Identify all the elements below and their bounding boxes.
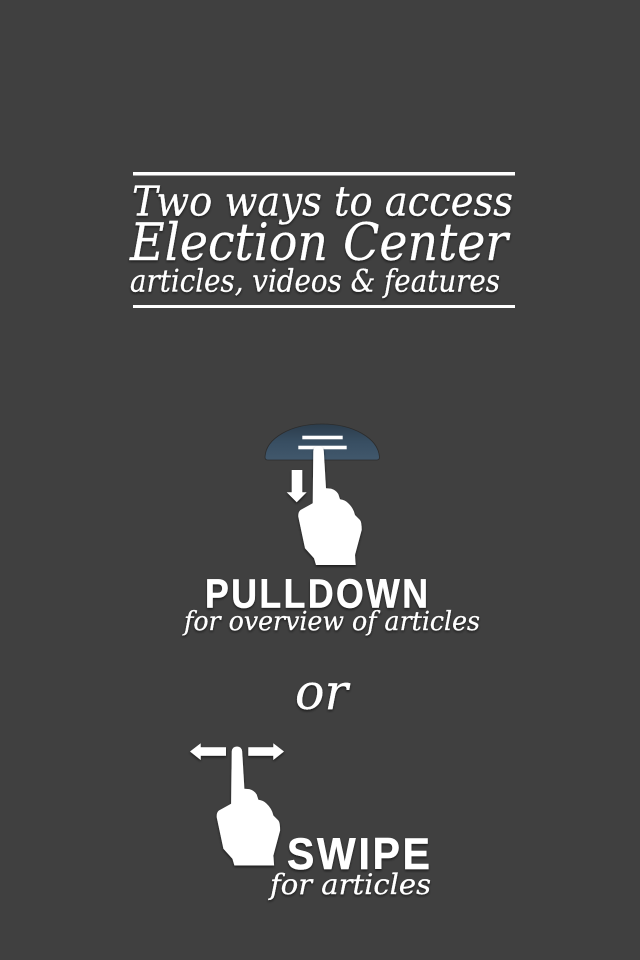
heading: swipe: SWIPE xyxy=(287,829,430,879)
title line 1: Two ways to access xyxy=(132,178,513,226)
swipe label xyxy=(268,829,431,901)
heading: pulldown: PULLDOWN xyxy=(205,571,428,617)
icon: left arrow xyxy=(190,743,226,760)
icon: right arrow xyxy=(248,743,284,760)
caption: pulldown: for overview of articles xyxy=(182,607,480,637)
title block xyxy=(129,172,515,308)
icon: tab menu lines xyxy=(298,436,347,449)
icon: pointing hand xyxy=(298,446,362,565)
pulldown gesture icon xyxy=(265,424,380,565)
swipe gesture icon xyxy=(190,743,284,866)
or separator: or xyxy=(295,663,351,721)
icon: down arrow xyxy=(287,470,307,502)
title line 2: Election Center xyxy=(129,214,510,273)
icon: pulldown tab xyxy=(265,424,380,460)
caption: swipe: for articles xyxy=(268,868,431,901)
title line 3: articles, videos & features xyxy=(130,264,500,300)
icon: swiping hand xyxy=(217,746,280,866)
pulldown label xyxy=(182,571,480,637)
